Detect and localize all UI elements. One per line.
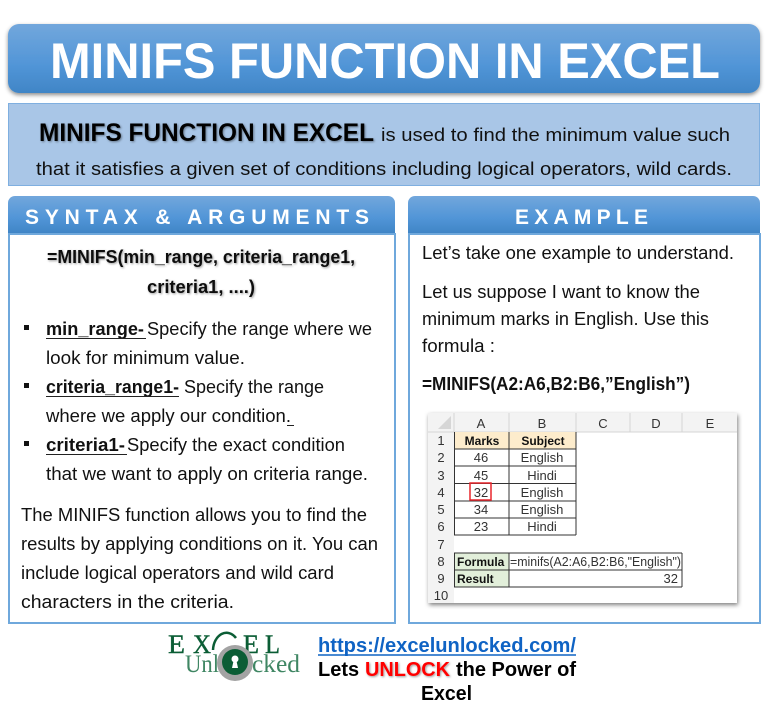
data table: 23 (474, 519, 488, 534)
panel: syntax and arguments (8, 196, 395, 623)
logo: Unl (185, 651, 219, 678)
column and row headers: 4 (437, 485, 445, 500)
syntax formula: criteria1, ....) (147, 277, 255, 297)
data table: Marks (465, 434, 500, 448)
column and row headers: D (651, 416, 661, 431)
logo: E (168, 630, 185, 659)
data table (454, 432, 576, 535)
definition text: that it satisfies a given set of conditions including logical operators, wild cards. (36, 159, 732, 179)
column and row headers: 5 (437, 502, 445, 517)
example heading: EXAMPLE (515, 206, 648, 229)
description paragraph (21, 505, 378, 612)
formula and result table (454, 553, 682, 587)
argument: min_range: min_range- (46, 319, 144, 339)
panel: example (408, 196, 760, 623)
description paragraph: characters in the criteria. (21, 592, 234, 612)
data table: Hindi (527, 519, 557, 534)
argument: criteria1: that we want to apply on criteria range. (46, 464, 368, 484)
logo: E (243, 630, 259, 659)
column and row headers: 10 (434, 588, 448, 603)
argument: criteria_range1 (24, 377, 324, 426)
data table: 45 (474, 468, 488, 483)
syntax heading: SYNTAX & ARGUMENTS (25, 206, 369, 229)
description paragraph: The MINIFS function allows you to find the (21, 505, 367, 525)
definition text: is used to find the minimum value such (381, 125, 730, 145)
argument: criteria1: criteria1- (46, 435, 125, 455)
column and row headers (428, 413, 737, 603)
column and row headers: 9 (437, 571, 445, 586)
description paragraph: include logical operators and wild card (21, 563, 334, 583)
column and row headers: 1 (437, 433, 445, 448)
example intro text: minimum marks in English. Use this (422, 309, 709, 329)
syntax formula: =MINIFS(min_range, criteria_range1, (47, 247, 355, 267)
title: MINIFS FUNCTION IN EXCEL (50, 33, 720, 89)
formula and result table: Formula (457, 555, 505, 569)
website link and tagline (318, 635, 576, 705)
data table: 46 (474, 450, 488, 465)
spreadsheet screenshot (428, 413, 737, 603)
logo (168, 630, 300, 681)
example intro text: formula : (422, 336, 495, 356)
example intro text: Let’s take one example to understand. (422, 243, 734, 263)
column and row headers: 7 (437, 537, 445, 552)
column and row headers: 3 (437, 468, 445, 483)
website link and tagline: Excel (421, 683, 472, 705)
example heading (408, 196, 760, 233)
argument: min_range (24, 319, 372, 368)
argument: criteria_range1: where we apply our condition. (45, 406, 291, 426)
data table: English (521, 485, 563, 500)
argument: criteria1 (24, 435, 368, 484)
data table: English (521, 450, 563, 465)
column and row headers: 2 (437, 450, 445, 465)
column and row headers: 6 (437, 519, 445, 534)
example formula: =MINIFS(A2:A6,B2:B6,”English”) (422, 374, 690, 394)
formula and result table: =minifs(A2:A6,B2:B6,"English") (510, 554, 681, 569)
description paragraph: results by applying conditions on it. You can (21, 534, 378, 554)
argument: min_range: Specify the range where we (147, 319, 372, 339)
formula and result table: 32 (664, 571, 678, 586)
syntax formula (47, 247, 355, 297)
column and row headers: E (706, 416, 715, 431)
highlight on minimum value (470, 483, 491, 500)
website link and tagline: the Power of (456, 659, 576, 681)
column and row headers: A (477, 416, 486, 431)
syntax heading (8, 196, 395, 233)
title banner (8, 24, 760, 93)
website link and tagline: Lets (318, 659, 359, 681)
example intro text (422, 243, 734, 356)
argument: criteria_range1: criteria_range1- (46, 377, 179, 397)
formula and result table: Result (457, 572, 494, 586)
column and row headers: B (538, 416, 546, 431)
definition heading: MINIFS FUNCTION IN EXCEL (39, 119, 374, 147)
argument: min_range: look for minimum value. (46, 348, 245, 368)
argument: criteria_range1: Specify the range (184, 377, 324, 397)
data table: 32 (474, 485, 488, 500)
example intro text: Let us suppose I want to know the (422, 282, 700, 302)
data table: English (521, 502, 563, 517)
definition text (36, 125, 732, 179)
column and row headers: C (598, 416, 608, 431)
data table: Hindi (527, 468, 557, 483)
logo: cked (252, 651, 300, 678)
logo: X (193, 630, 211, 659)
website link and tagline: https://excelunlocked.com/ (318, 635, 576, 657)
logo: L (265, 630, 280, 659)
argument: criteria1: Specify the exact condition (127, 435, 345, 455)
data table: 34 (474, 502, 488, 517)
panel: definition (8, 104, 760, 186)
website link and tagline: UNLOCK (365, 659, 451, 681)
column and row headers: 8 (437, 554, 445, 569)
data table: Subject (521, 434, 565, 448)
